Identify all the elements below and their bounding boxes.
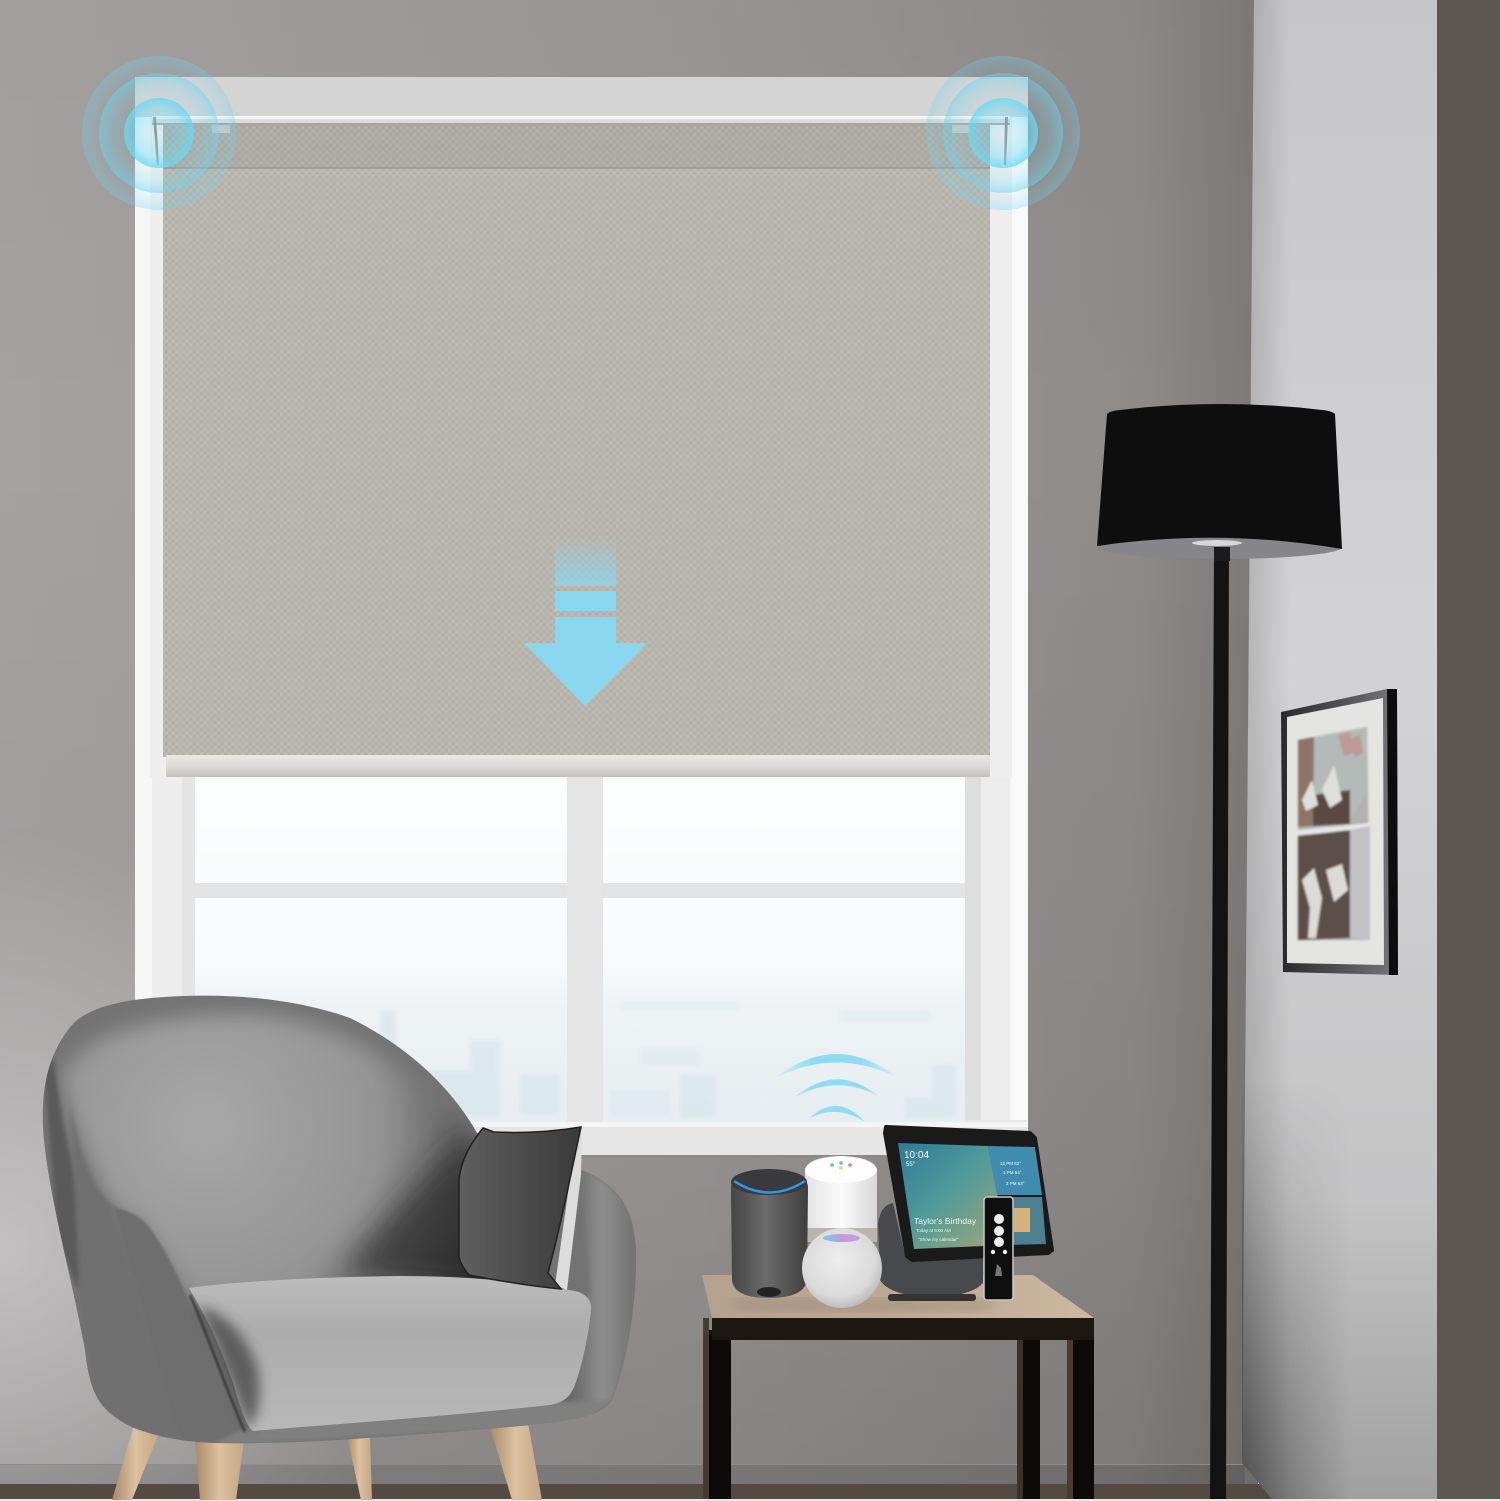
pillow back [555, 1127, 582, 1290]
homepod mini [802, 1228, 882, 1308]
table legs [703, 1318, 709, 1499]
lamp shade underside [1098, 535, 1342, 559]
chair base band [212, 1400, 612, 1445]
chair back inner panel [62, 1014, 500, 1300]
shadow behind pillow [334, 1127, 484, 1279]
window glass and city view [195, 777, 965, 1122]
framed picture [1281, 689, 1398, 975]
armchair [43, 996, 636, 1500]
right side wall [1242, 0, 1437, 1499]
picture artwork [1298, 727, 1370, 940]
echo speaker [731, 1169, 808, 1298]
echo show base [878, 1203, 983, 1301]
table apron [712, 1318, 1094, 1340]
smart devices [731, 1127, 1052, 1308]
window muntins [195, 777, 965, 1122]
blind roller shadow line [163, 125, 990, 169]
down arrow [524, 537, 647, 706]
wifi waves [775, 1054, 898, 1122]
chair left edge shade [44, 1060, 80, 1286]
tablet screen: 10:04 [904, 1150, 929, 1161]
signal rings: left [82, 56, 236, 210]
seat seam [190, 1295, 245, 1432]
tablet screen: 1 PM 54° [1003, 1170, 1022, 1175]
tablet screen: Today at 9:00 AM [916, 1228, 951, 1233]
distant city skyline [380, 1000, 956, 1118]
table top [702, 1275, 1094, 1318]
echo show tablet [885, 1127, 1052, 1260]
signal rings: right [926, 56, 1080, 210]
tablet screen: Taylor's Birthday [914, 1216, 977, 1226]
tablet screen: "Show my calendar" [918, 1237, 959, 1242]
left arm [114, 1206, 210, 1443]
tablet screen [898, 1143, 1046, 1249]
lamp shade [1097, 404, 1342, 549]
dark door strip [1437, 0, 1500, 1499]
pillow [459, 1127, 581, 1289]
floor [0, 1484, 1290, 1499]
right arm [564, 1175, 625, 1402]
floor lamp [1097, 404, 1342, 1499]
window frame [135, 77, 1028, 1158]
remote control [984, 1197, 1013, 1300]
baseboard [0, 1464, 1245, 1484]
lamp pole [1210, 545, 1229, 1499]
chair legs [112, 1423, 542, 1500]
tablet screen: 55° [906, 1162, 916, 1168]
side table [702, 1275, 1094, 1499]
tablet screen: 12 PM 62° [1000, 1161, 1021, 1166]
window sill [190, 1120, 1027, 1155]
roller blind fabric [163, 125, 990, 757]
google home speaker [805, 1156, 877, 1242]
blind headrail [152, 116, 1010, 165]
bottom edge line [0, 1499, 1500, 1501]
seat shadow left [197, 1305, 260, 1428]
chair body [43, 996, 636, 1443]
chair seat cushion [189, 1276, 591, 1431]
tablet screen: 2 PM 53° [1006, 1181, 1025, 1186]
blind bottom bar [166, 755, 990, 777]
